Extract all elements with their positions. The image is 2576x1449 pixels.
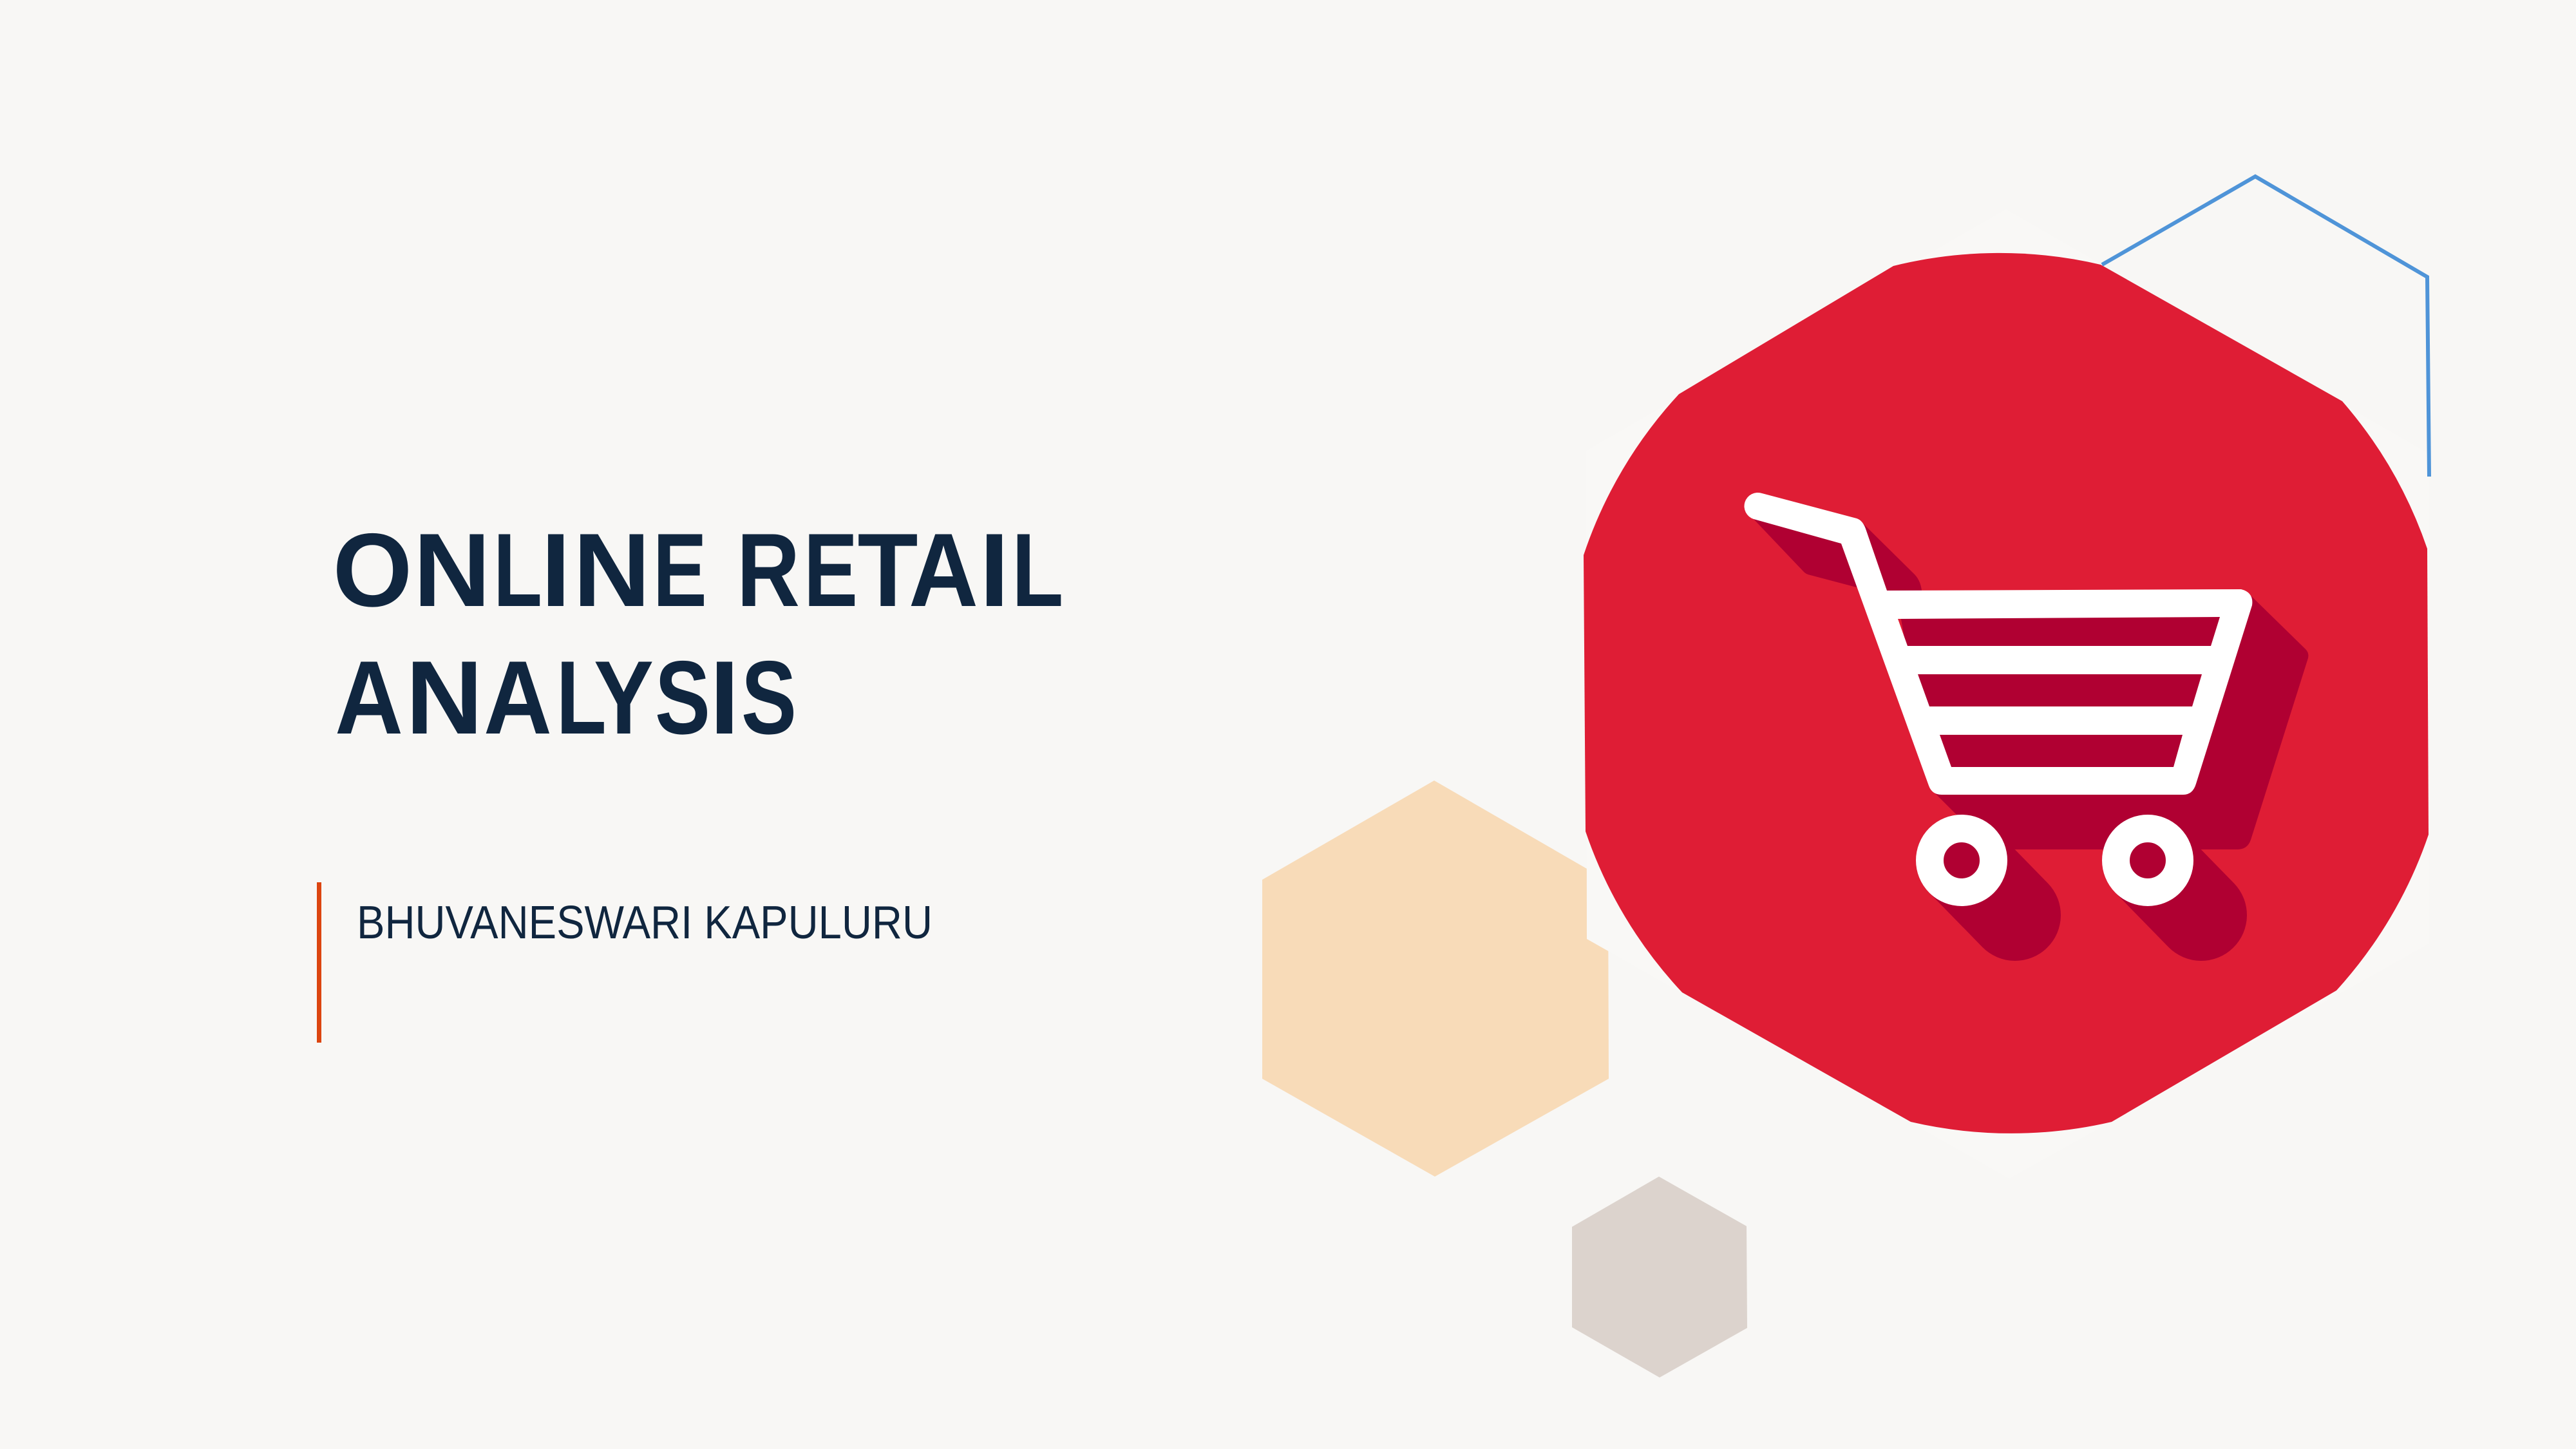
title: Y — [594, 639, 654, 756]
title: A — [335, 639, 403, 756]
title: O — [333, 512, 412, 629]
title: N — [413, 512, 491, 629]
title: N — [573, 512, 650, 629]
taupe hexagon — [1572, 1177, 1747, 1378]
icon: left wheel — [1929, 828, 1994, 893]
title: A — [484, 639, 552, 756]
pale hexagon backing of the cart image — [1586, 209, 2429, 1179]
peach hexagon — [1262, 781, 1609, 1177]
icon: right wheel — [2116, 828, 2179, 893]
title: A — [909, 512, 978, 629]
blue hexagon outline — [2102, 176, 2429, 477]
title: L — [493, 512, 542, 629]
subtitle: author name: BHUVANESWARI KAPULURU — [357, 897, 933, 949]
title: L — [1012, 512, 1062, 629]
icon: cart body — [1744, 493, 2252, 795]
red badge with shopping cart — [1584, 253, 2429, 1133]
title: N — [406, 639, 483, 756]
title: R — [737, 512, 800, 629]
orange accent bar — [317, 882, 321, 1043]
red badge — [1584, 253, 2429, 1133]
title: L — [556, 639, 607, 756]
title: T — [858, 512, 918, 629]
title: S — [741, 639, 797, 756]
title: I — [980, 512, 1009, 629]
title: S — [655, 639, 710, 756]
icon: cart long shadow — [1754, 519, 2308, 915]
title: E — [653, 512, 707, 629]
title: I — [541, 512, 571, 629]
title: I — [710, 639, 739, 756]
title: E — [804, 512, 858, 629]
